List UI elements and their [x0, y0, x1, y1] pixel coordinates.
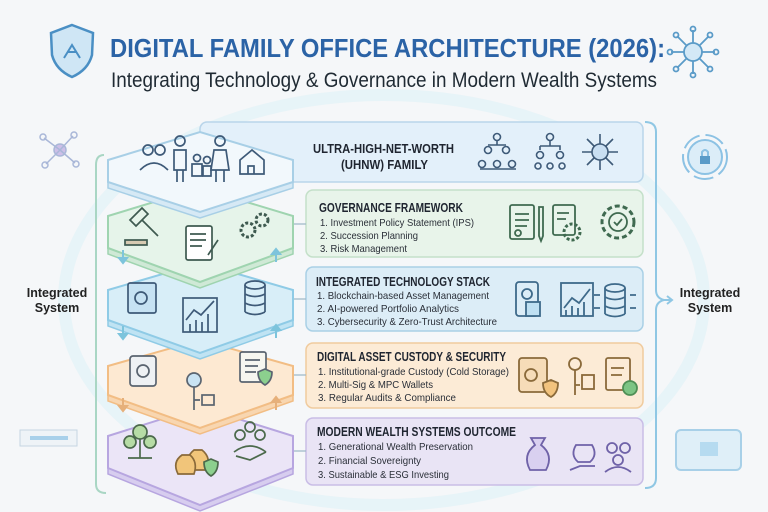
layer 4: orange hex	[108, 340, 293, 434]
panel 2: governance: 2. Succession Planning	[320, 230, 418, 242]
subtitle: Integrating Technology & Governance in Modern Wealth Systems	[111, 69, 657, 92]
panel 3: technology stack: 1. Blockchain-based Asset Management	[317, 290, 489, 302]
panel 5: modern wealth: 2. Financial Sovereignty	[318, 455, 422, 467]
icon: device right	[676, 430, 741, 470]
panel 5: modern wealth: 3. Sustainable & ESG Investing	[318, 469, 449, 481]
panel 5: modern wealth: MODERN WEALTH SYSTEMS OUTCOME	[317, 425, 516, 439]
label: Integrated System right: Integrated	[680, 286, 740, 300]
panel 4: custody: DIGITAL ASSET CUSTODY & SECURITY	[317, 350, 507, 364]
panel 3: technology stack: INTEGRATED TECHNOLOGY STACK	[316, 275, 490, 289]
title: DIGITAL FAMILY OFFICE ARCHITECTURE (2026):	[110, 33, 665, 63]
panel 1: UHNW family: (UHNW) FAMILY	[341, 158, 429, 172]
layer 5: purple hex	[108, 407, 293, 511]
icon: network	[668, 26, 718, 78]
panel 1: UHNW family: ULTRA-HIGH-NET-WORTH	[313, 142, 454, 156]
layer 2: green hex	[108, 188, 293, 288]
connectors hex to panels	[293, 224, 306, 451]
label: Integrated System left: System	[35, 301, 79, 315]
panel 2: governance	[306, 190, 643, 257]
bracket: left	[96, 155, 106, 493]
panel 4: custody: 2. Multi-Sig & MPC Wallets	[318, 379, 433, 391]
panel 4: custody: 3. Regular Audits & Compliance	[318, 392, 456, 404]
panel 3: technology stack	[306, 267, 643, 331]
layer 3: blue hex	[108, 263, 293, 359]
panel 1: UHNW family	[200, 122, 643, 182]
panel 3: technology stack: 3. Cybersecurity & Zero-Trust Architecture	[317, 316, 497, 328]
icon: shield	[51, 25, 93, 77]
vertical flow arrows	[119, 249, 280, 339]
panel 3: technology stack: 2. AI-powered Portfolio Analytics	[317, 303, 459, 315]
panel 4: custody	[306, 343, 643, 408]
icon: lock circle right	[683, 135, 727, 179]
panel 5: modern wealth: 1. Generational Wealth Preservation	[318, 441, 473, 453]
panel 2: governance: 3. Risk Management	[320, 243, 407, 255]
decorative left network	[40, 132, 79, 168]
label: Integrated System left: Integrated	[27, 286, 87, 300]
panel 2: governance: GOVERNANCE FRAMEWORK	[319, 201, 463, 215]
layer 1: top hex family	[108, 132, 293, 218]
icon: bar left	[20, 430, 77, 446]
bracket: right with arrow	[645, 122, 672, 488]
panel 4: custody: 1. Institutional-grade Custody (Cold Storage)	[318, 366, 509, 378]
panel 2: governance: 1. Investment Policy Statement (IPS)	[320, 217, 474, 229]
label: Integrated System right: System	[688, 301, 732, 315]
panel 5: modern wealth	[306, 418, 643, 485]
